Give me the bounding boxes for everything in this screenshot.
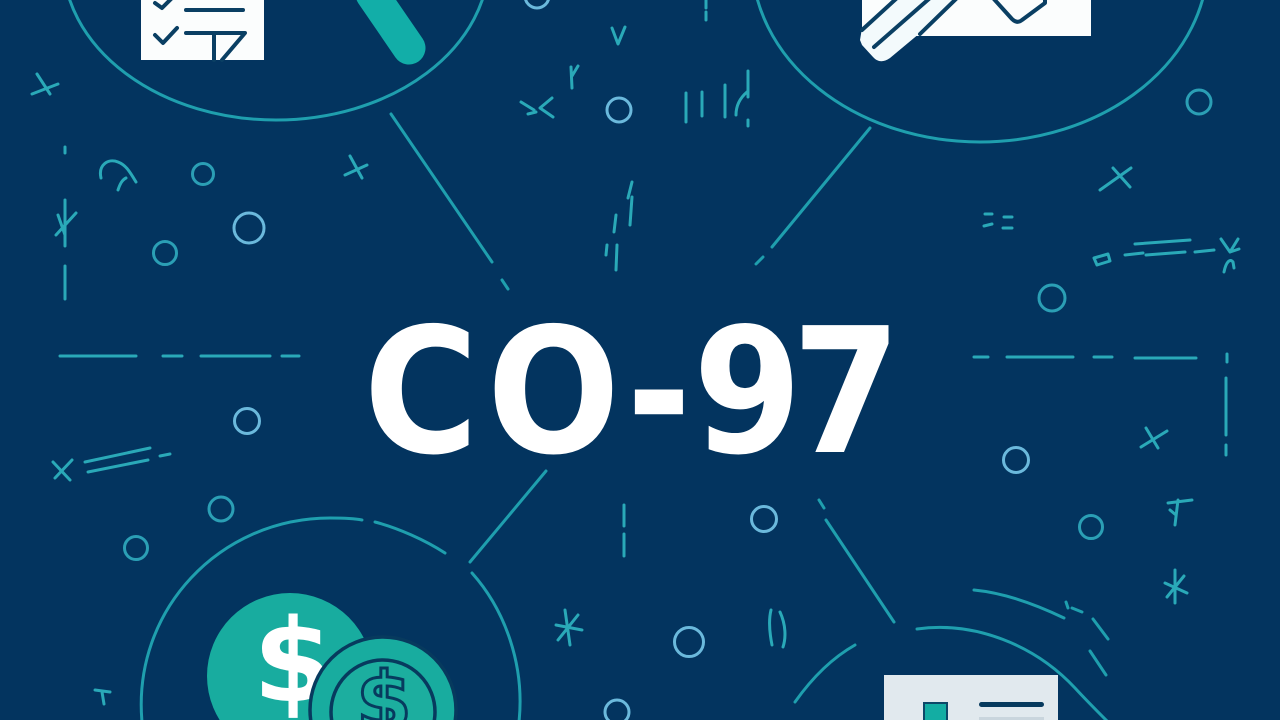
panel: bottom-left coins xyxy=(141,518,520,720)
panel: top-left checklist and magnifier xyxy=(63,0,489,120)
panel: bottom-right card xyxy=(795,590,1108,720)
icon: checklist xyxy=(141,0,264,60)
icon: large coin xyxy=(207,593,373,720)
icon: magnifier handle xyxy=(372,0,409,48)
icon: document card xyxy=(884,675,1058,720)
connector lines xyxy=(391,114,894,622)
icon: envelope xyxy=(862,0,1091,36)
panel: top-right envelope and pencil xyxy=(752,0,1208,142)
dashed axis lines xyxy=(60,147,1227,556)
icon: pencil xyxy=(860,0,957,61)
icon: small coin xyxy=(310,637,456,720)
title: CO-97 xyxy=(364,291,901,494)
